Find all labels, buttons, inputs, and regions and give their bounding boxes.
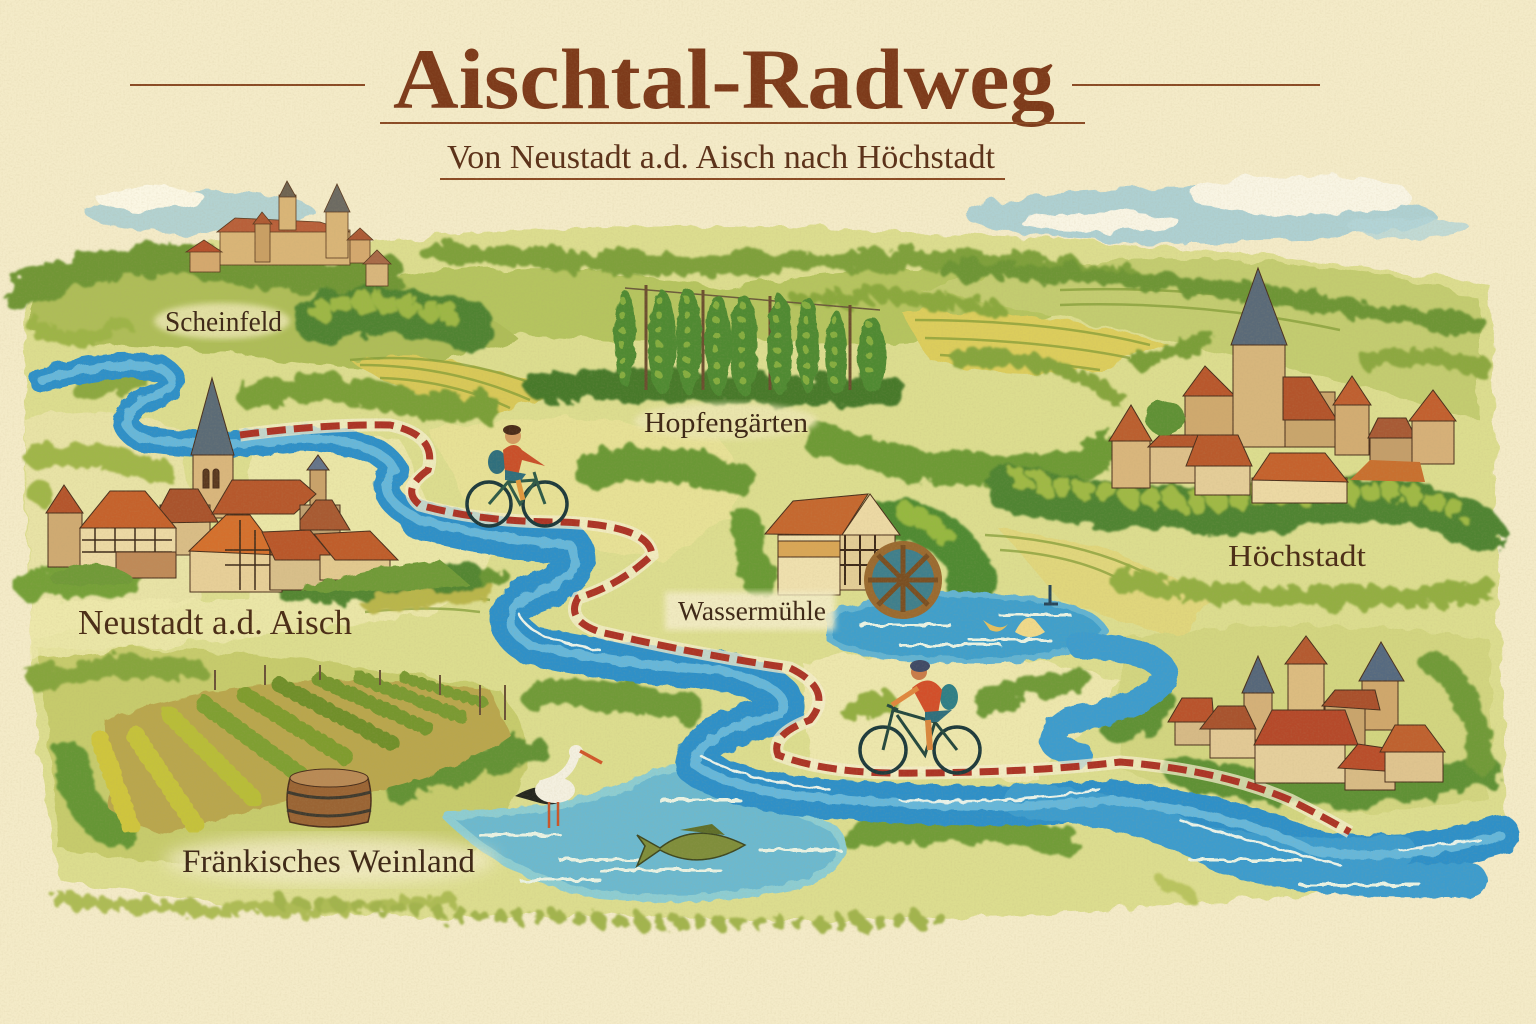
landscape: base hills and meadows [24,226,1505,921]
mill lake [830,594,1105,661]
town: Neustadt a.d. Aisch [46,378,398,592]
cyclist 1 [467,425,567,526]
main river lower part [420,520,1500,855]
castle: Scheinfeld [186,181,391,286]
town: lower right village [1168,636,1445,790]
river Aisch with lake and wetland [42,366,1500,898]
stork [515,745,602,828]
main river upper part [42,366,420,520]
label: Wassermühle: Wassermühle [678,596,826,626]
bush beside Höchstadt church [1145,401,1185,435]
label: Wassermühle [665,592,835,630]
water mill [765,494,938,615]
wine barrel [287,769,371,827]
cyclist 2 [860,660,980,773]
bush in front of Neustadt [50,560,470,592]
vineyard [100,665,510,835]
label: Scheinfeld: Scheinfeld [165,307,282,338]
label: Höchstadt: Höchstadt [1228,538,1366,573]
striped fields [350,289,1340,612]
church [191,378,234,518]
label: Fränkisches Weinland: Fränkisches Weinland [182,844,475,880]
red dashed bike route [240,425,1350,832]
label: Fränkisches Weinland [165,836,495,884]
label: Hopfengärten: Hopfengärten [644,408,808,439]
water wheel [868,545,938,615]
bushes: hedges and tree clusters [20,250,1490,922]
half-timbered house left [80,528,176,578]
title: Aischtal-Radweg [393,31,1055,127]
town: Höchstadt [1109,268,1456,503]
ducks and sailboat [983,585,1058,637]
fish [637,824,745,866]
wetland pool [445,767,842,898]
sky and clouds [85,175,1470,243]
hop garden [614,285,886,395]
label: Neustadt a.d. Aisch: Neustadt a.d. Aisch [78,603,352,642]
central house [190,550,282,592]
subtitle: Von Neustadt a.d. Aisch nach Höchstadt [447,139,996,176]
side branch [1052,645,1165,755]
